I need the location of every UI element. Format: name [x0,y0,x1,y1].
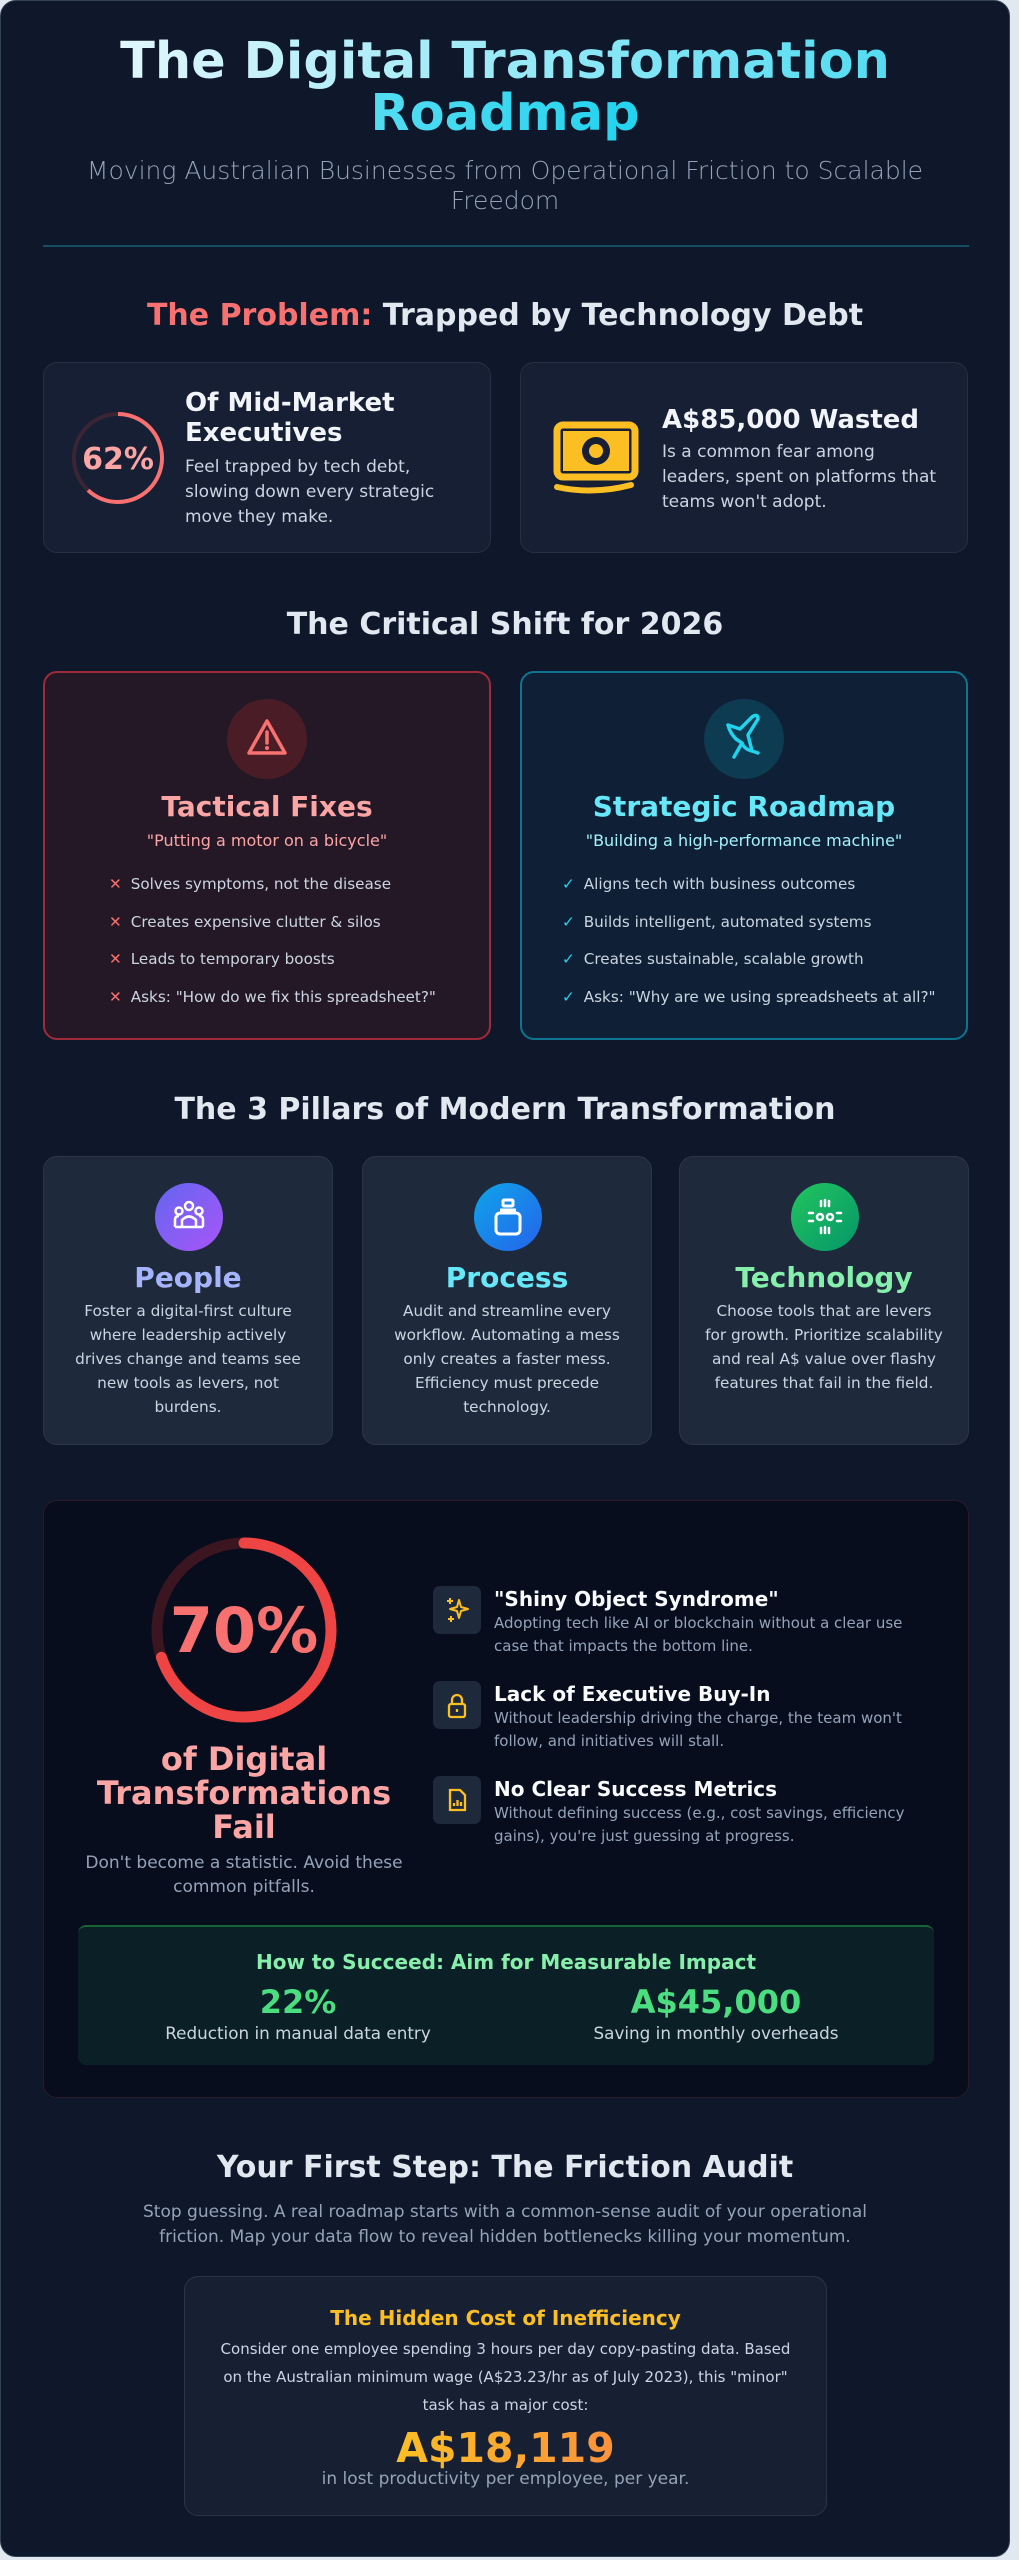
stat: 22% [165,1983,431,2043]
text: Choose tools that are levers [716,1302,932,1320]
title: The Digital Transformation [120,32,890,91]
icon: chip [791,1183,859,1251]
item: metrics [433,1776,905,1845]
title [120,32,890,143]
list: ✕ Leads to temporary boosts [109,950,335,968]
stat: 22%: Reduction in manual data entry [165,2023,431,2043]
text block: Feel trapped by tech debt, slowing down every strategic move they make. [185,457,434,527]
heading: problem: The Problem: Trapped by Technology Debt [147,298,863,333]
icon: process [474,1183,542,1251]
icon: people [155,1183,223,1251]
item: metrics: Without defining success (e.g., cost savings, efficiency gains), you're just guessing at progress. [494,1804,905,1845]
stat: A$45,000: A$45,000 [631,1983,801,2021]
heading: People [134,1261,242,1294]
list [562,875,936,1006]
item: shiny object: "Shiny Object Syndrome" [494,1587,779,1611]
panel: hidden cost: Consider one employee spending 3 hours per day copy-pasting data. Based on the Australian minimum wage (A$23.23/hr as of July 2023), this "minor" task has a major cost: [221,2340,790,2414]
quote: "Building a high-performance machine" [586,831,902,850]
chart: 62% ring [72,412,164,504]
heading: fail: of Digital Transformations Fail [97,1740,391,1846]
subtitle: Moving Australian Businesses from Operational Friction to Scalable Freedom [87,156,923,215]
list: ✓ Builds intelligent, automated systems [562,912,872,930]
panel: tactical fixes [43,671,491,1040]
text block [185,388,434,527]
chart: 62% ring: 62% [82,442,154,477]
stat: A$45,000: Saving in monthly overheads [594,2023,838,2043]
icon: money [554,422,638,494]
text: for growth. Prioritize scalability and real A$ value over flashy features that fail in the field. [705,1326,943,1392]
quote: "Putting a motor on a bicycle" [147,831,387,850]
text: Audit and streamline every workflow. Automating a mess only creates a faster mess. Efficiency must precede technology. [394,1302,620,1416]
text block: Of Mid-Market Executives [185,388,395,448]
panel: hidden cost [184,2276,827,2516]
callout: how to succeed [78,1925,934,2065]
item: exec buy-in: Without leadership driving the charge, the team won't follow, and initiatives will stall. [494,1709,902,1750]
panel: strategic roadmap [520,671,968,1040]
text block: Is a common fear among leaders, spent on platforms that teams won't adopt. [662,442,936,512]
text: Foster a digital-first culture where leadership actively drives change and teams see new tools as levers, not burdens. [75,1302,301,1416]
stat: A$45,000 [594,1983,838,2043]
heading: critical shift: The Critical Shift for 2026 [287,607,723,642]
panel: people [43,1156,333,1445]
heading: Technology [735,1261,913,1294]
stat: 22%: 22% [260,1983,336,2021]
list: ✓ Aligns tech with business outcomes [562,875,855,893]
item: shiny object [433,1586,902,1655]
panel: process [362,1156,652,1445]
item: metrics: No Clear Success Metrics [494,1777,777,1801]
panel: hidden cost: in lost productivity per employee, per year. [322,2469,689,2489]
list: ✕ Asks: "How do we fix this spreadsheet?" [109,988,436,1006]
list: ✓ Asks: "Why are we using spreadsheets at all?" [562,988,936,1006]
text: Don't become a statistic. Avoid these common pitfalls. [85,1853,403,1897]
icon: warning [227,699,307,779]
stat: A$18,119: A$18,119 [396,2424,615,2472]
list: ✓ Creates sustainable, scalable growth [562,950,864,968]
heading: strategic: Strategic Roadmap [593,790,895,823]
icon: report [433,1776,481,1824]
heading: friction audit: Your First Step: The Friction Audit [217,2150,793,2185]
panel: A$85,000 wasted [520,362,968,553]
chart: 70% ring: 70% [170,1594,318,1667]
list: ✕ Creates expensive clutter & silos [109,912,381,930]
list: ✕ Solves symptoms, not the disease [109,875,391,893]
item: exec buy-in: Lack of Executive Buy-In [494,1682,770,1706]
panel: failure stats [43,1500,969,2098]
panel: 62% executives [43,362,491,553]
text: audit intro: Stop guessing. A real roadmap starts with a common-sense audit of your operational friction. Map your data flow to reveal hidden bottlenecks killing your momentum. [143,2202,867,2247]
heading: Process [446,1261,568,1294]
icon: rocket [704,699,784,779]
heading: tactical: Tactical Fixes [161,790,373,823]
text block [662,405,936,512]
icon: sparkle [433,1586,481,1634]
list [109,875,436,1006]
callout: how to succeed: How to Succeed: Aim for Measurable Impact [256,1950,756,1974]
item: exec buy-in [433,1681,902,1750]
title: Roadmap [370,84,640,143]
item: shiny object: Adopting tech like AI or blockchain without a clear use case that impacts the bottom line. [494,1614,902,1655]
panel: technology [679,1156,969,1445]
icon: lock [433,1681,481,1729]
heading: pillars: The 3 Pillars of Modern Transformation [174,1092,836,1127]
text block: A$85,000 Wasted [662,405,919,435]
chart: 70% ring [152,1538,336,1722]
panel: hidden cost: The Hidden Cost of Inefficiency [330,2306,681,2330]
